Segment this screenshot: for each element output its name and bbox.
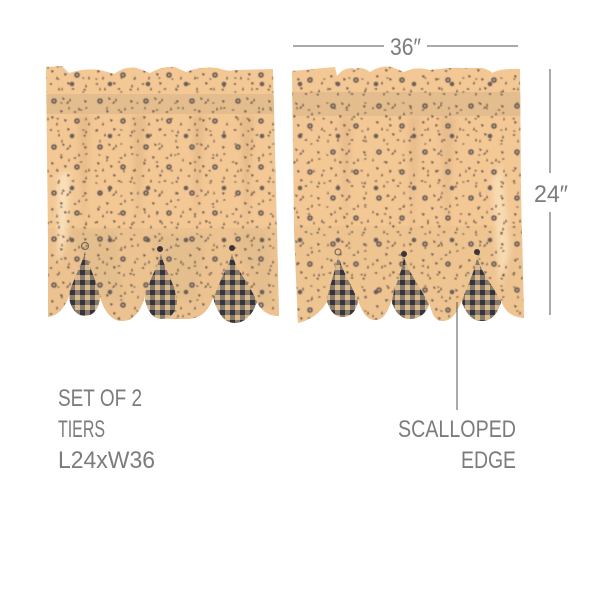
button 2 [401, 251, 407, 257]
button 3 [474, 249, 480, 255]
fabric base [40, 60, 285, 330]
rod pocket band [285, 92, 530, 116]
fabric base [292, 66, 524, 323]
button loop 1 [335, 249, 341, 255]
rod pocket band [40, 94, 285, 114]
lower darker band [48, 228, 279, 323]
scalloped edge callout: SCALLOPED [398, 416, 516, 443]
left curtain panel [40, 60, 285, 330]
gingham scallop 2 [392, 256, 429, 319]
product description text: TIERS [58, 416, 105, 443]
button 3 [229, 245, 235, 251]
gingham scallop 3 [214, 254, 257, 323]
scalloped edge callout: EDGE [461, 447, 516, 474]
product description text: SET OF 2 [58, 385, 142, 412]
scalloped edge callout [398, 302, 516, 474]
gingham scallop 2 [145, 254, 177, 319]
height dimension 24 inches: 24″ [534, 181, 568, 208]
gingham scallop 1 [327, 254, 358, 317]
button 2 [157, 246, 163, 252]
product description text [58, 385, 155, 474]
width dimension 36 inches: 36″ [390, 34, 421, 61]
right curtain panel [292, 66, 524, 323]
gingham scallop 1 [69, 252, 100, 316]
lower darker band [285, 226, 530, 326]
button loop 1 [82, 242, 88, 250]
gingham scallop 3 [462, 256, 501, 321]
product description text: L24xW36 [58, 447, 155, 474]
